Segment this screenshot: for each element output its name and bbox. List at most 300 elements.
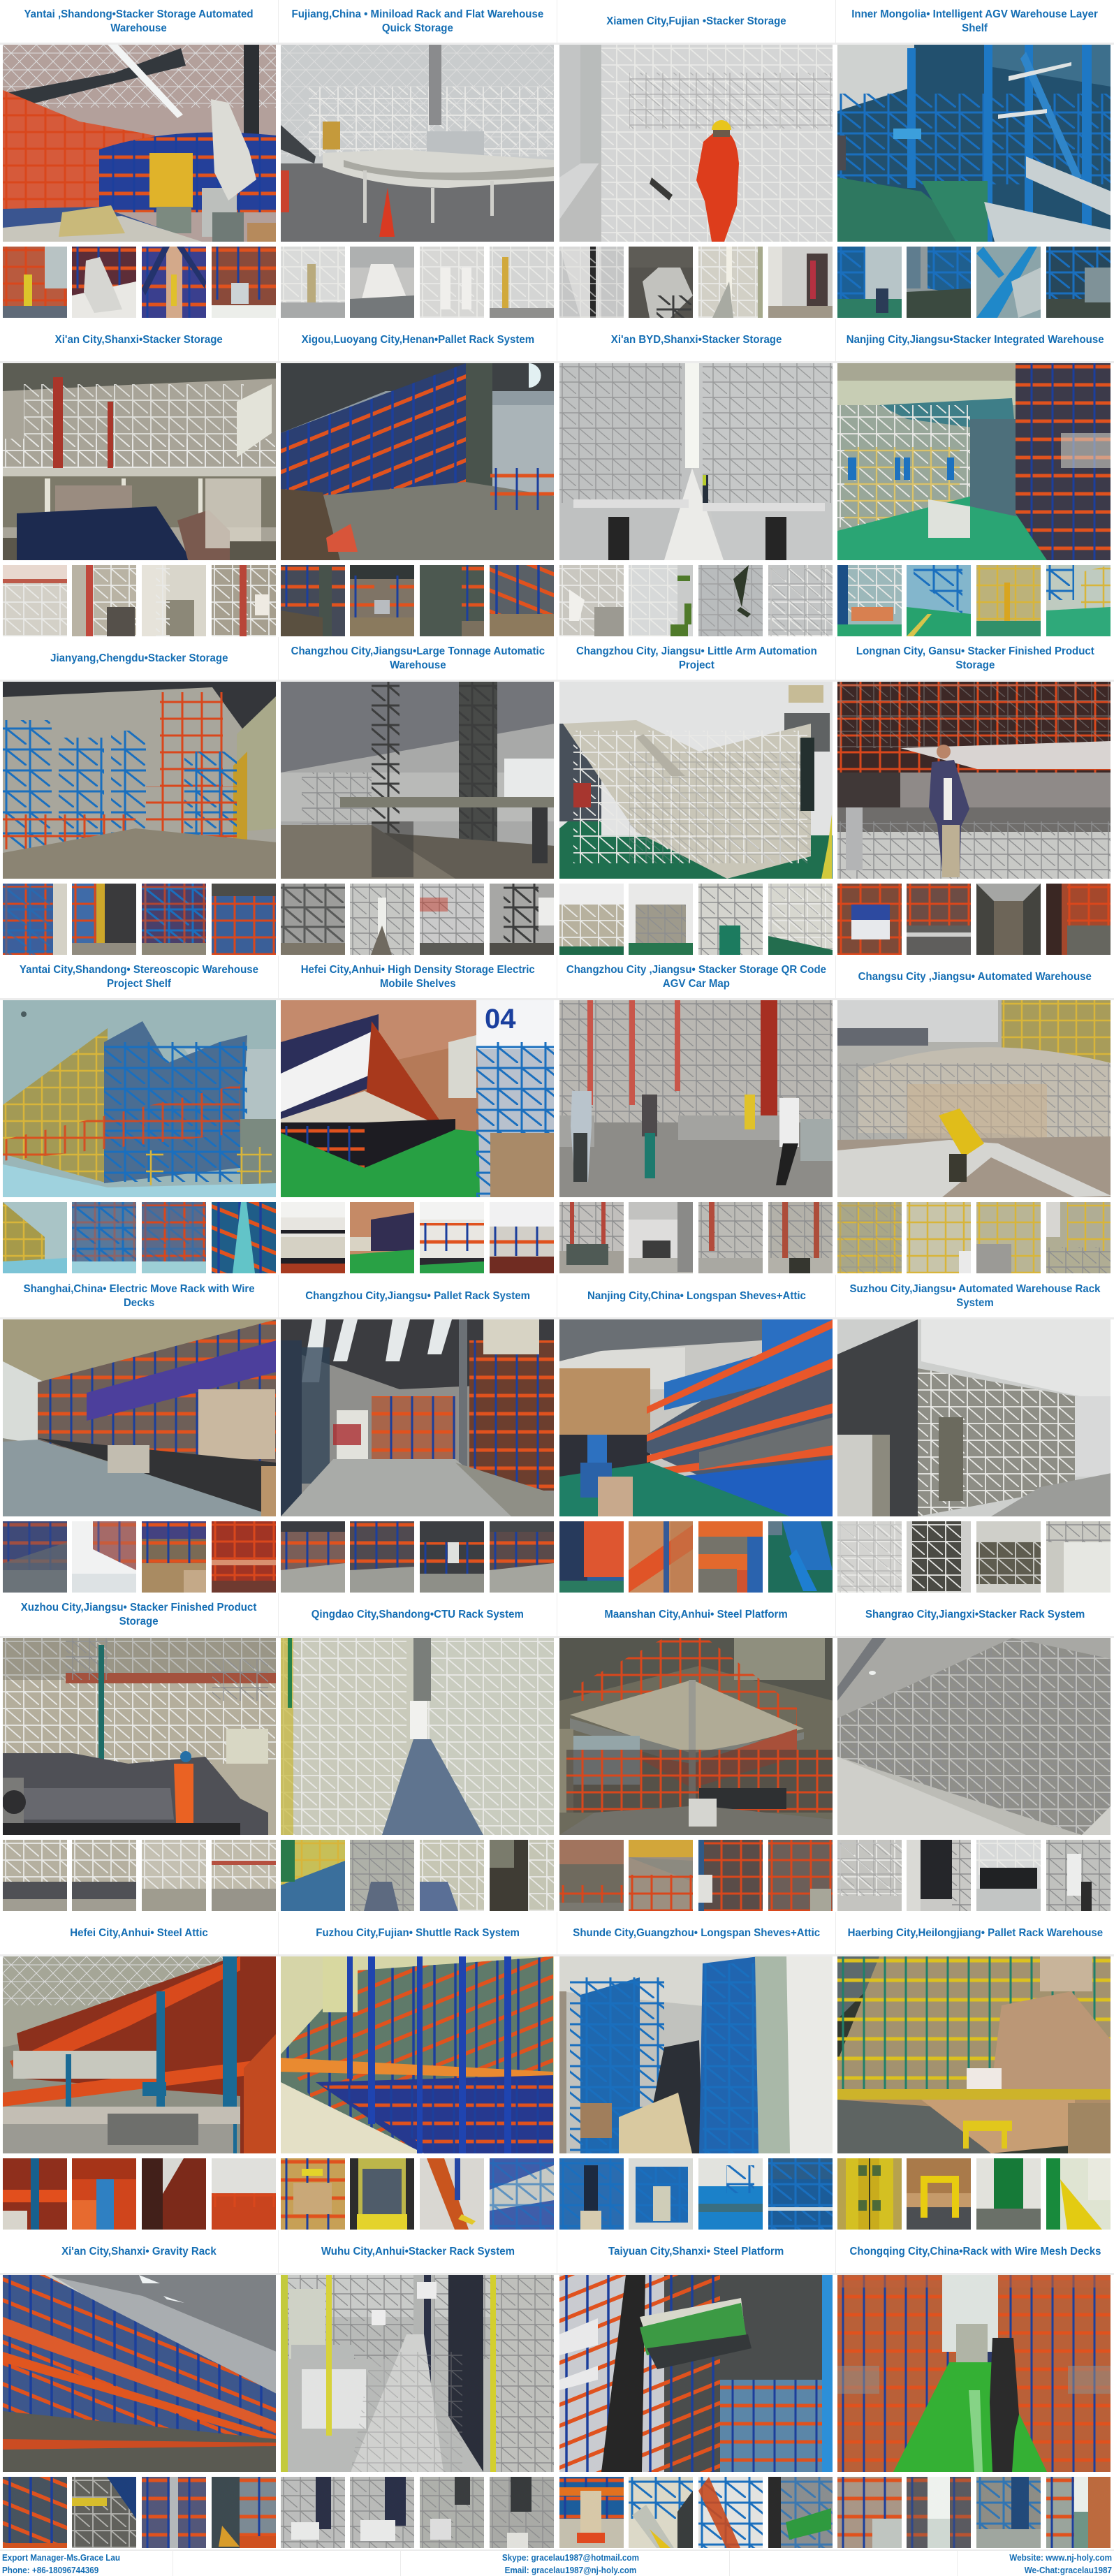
thumbnail 2 bbox=[907, 565, 971, 636]
thumbnail strip bbox=[281, 1202, 554, 1273]
thumbnail 3 bbox=[420, 247, 484, 318]
panel: Hefei steel attic bbox=[0, 1912, 279, 2230]
caption: Storage bbox=[119, 1615, 159, 1627]
caption: Changzhou City, Jiangsu• Little Arm Automation bbox=[576, 645, 816, 657]
main photo bbox=[837, 45, 1111, 242]
thumbnail 4 bbox=[490, 1840, 554, 1911]
caption: Qingdao City,Shandong•CTU Rack System bbox=[312, 1608, 524, 1620]
thumbnail strip bbox=[3, 884, 276, 955]
caption bbox=[279, 2230, 557, 2275]
thumbnail 2 bbox=[907, 247, 971, 318]
panel: Xuzhou stacker finished product bbox=[0, 1593, 279, 1912]
caption bbox=[279, 1275, 557, 1319]
main photo bbox=[559, 45, 833, 242]
thumbnail 1 bbox=[559, 2477, 624, 2548]
thumbnail 4 bbox=[212, 1840, 276, 1911]
thumbnail 2 bbox=[629, 2158, 693, 2230]
caption bbox=[836, 1593, 1114, 1638]
thumbnail 4 bbox=[490, 2477, 554, 2548]
main photo bbox=[281, 2275, 554, 2472]
caption: Xi'an City,Shanxi•Stacker Storage bbox=[55, 334, 223, 345]
panel: Shunde longspan attic bbox=[557, 1912, 836, 2230]
panel: Fuzhou shuttle rack bbox=[279, 1912, 557, 2230]
thumbnail 4 bbox=[1046, 565, 1111, 636]
thumbnail 4 bbox=[490, 1202, 554, 1273]
thumbnail 1 bbox=[559, 1521, 624, 1593]
main photo bbox=[559, 1319, 833, 1516]
caption bbox=[0, 1912, 279, 1956]
main photo bbox=[3, 682, 276, 879]
main photo bbox=[3, 1956, 276, 2153]
contact: skype and email: Email: gracelau1987@nj-holy.com bbox=[505, 2565, 636, 2575]
thumbnail strip bbox=[559, 1521, 833, 1593]
thumbnail 1 bbox=[281, 1202, 345, 1273]
caption bbox=[836, 1275, 1114, 1319]
thumbnail 4 bbox=[1046, 1840, 1111, 1911]
thumbnail 2 bbox=[72, 1202, 136, 1273]
caption: Shelf bbox=[962, 22, 988, 34]
thumbnail 2 bbox=[629, 1521, 693, 1593]
caption: Fujiang,China • Miniload Rack and Flat Warehouse bbox=[292, 8, 543, 20]
thumbnail 1 bbox=[281, 1521, 345, 1593]
thumbnail strip bbox=[559, 2158, 833, 2230]
main photo bbox=[3, 363, 276, 560]
thumbnail 3 bbox=[698, 565, 763, 636]
thumbnail strip bbox=[281, 2477, 554, 2548]
main photo bbox=[559, 363, 833, 560]
thumbnail 3 bbox=[142, 2477, 206, 2548]
contact: website and wechat: We-Chat:gracelau1987 bbox=[1025, 2565, 1112, 2575]
thumbnail 1 bbox=[3, 884, 67, 955]
thumbnail strip bbox=[3, 2158, 276, 2230]
thumbnail 2 bbox=[72, 884, 136, 955]
main photo bbox=[837, 363, 1111, 560]
thumbnail 2 bbox=[350, 884, 414, 955]
main photo bbox=[837, 682, 1111, 879]
caption bbox=[836, 2230, 1114, 2275]
contact: skype and email bbox=[494, 2552, 634, 2576]
thumbnail 3 bbox=[420, 565, 484, 636]
thumbnail strip bbox=[837, 1840, 1111, 1911]
panel: Jianyang Chengdu stacker storage bbox=[0, 637, 279, 955]
thumbnail strip bbox=[281, 1840, 554, 1911]
thumbnail 4 bbox=[1046, 884, 1111, 955]
caption: Changzhou City ,Jiangsu• Stacker Storage QR Code bbox=[566, 964, 826, 975]
main photo bbox=[281, 45, 554, 242]
caption: Yantai ,Shandong•Stacker Storage Automated bbox=[24, 8, 254, 20]
thumbnail 2 bbox=[629, 2477, 693, 2548]
caption: Hefei City,Anhui• High Density Storage Electric bbox=[300, 964, 535, 975]
thumbnail 2 bbox=[629, 1202, 693, 1273]
thumbnail 3 bbox=[420, 1840, 484, 1911]
caption: Xi'an City,Shanxi• Gravity Rack bbox=[61, 2245, 217, 2257]
thumbnail strip bbox=[3, 1840, 276, 1911]
thumbnail 4 bbox=[212, 1202, 276, 1273]
thumbnail 1 bbox=[559, 1202, 624, 1273]
main photo bbox=[3, 45, 276, 242]
caption: AGV Car Map bbox=[663, 978, 730, 989]
panel: Chongqing rack with wire mesh decks bbox=[836, 2230, 1114, 2549]
contact: website and wechat: Website: www.nj-holy.com bbox=[1009, 2552, 1112, 2563]
thumbnail 2 bbox=[350, 1840, 414, 1911]
thumbnail 1 bbox=[837, 1840, 902, 1911]
caption: Shunde City,Guangzhou• Longspan Sheves+Attic bbox=[573, 1926, 820, 1939]
thumbnail 3 bbox=[976, 2477, 1041, 2548]
contact: skype and email: Skype: gracelau1987@hotmail.com bbox=[502, 2552, 639, 2563]
thumbnail 3 bbox=[976, 1202, 1041, 1273]
caption bbox=[279, 956, 557, 1000]
thumbnail strip bbox=[559, 565, 833, 636]
thumbnail strip bbox=[559, 1840, 833, 1911]
thumbnail 3 bbox=[420, 1202, 484, 1273]
main photo bbox=[281, 1000, 554, 1197]
panel: Suzhou automated warehouse rack bbox=[836, 1282, 1114, 1593]
caption: Shanghai,China• Electric Move Rack with Wire bbox=[23, 1282, 255, 1295]
thumbnail 4 bbox=[768, 565, 833, 636]
main photo bbox=[281, 1956, 554, 2153]
caption: System bbox=[956, 1296, 994, 1309]
panel: Maanshan steel platform bbox=[557, 1593, 836, 1912]
panel: Haerbing pallet rack warehouse bbox=[836, 1912, 1114, 2230]
footer contact bar bbox=[0, 2549, 1114, 2576]
caption: Nanjing City,China• Longspan Sheves+Attic bbox=[587, 1289, 805, 1302]
panel: Fujiang China miniload rack bbox=[279, 0, 557, 318]
caption bbox=[557, 1593, 836, 1638]
caption: Haerbing City,Heilongjiang• Pallet Rack Warehouse bbox=[847, 1926, 1103, 1939]
panel: Wuhu stacker rack bbox=[279, 2230, 557, 2549]
thumbnail 2 bbox=[350, 2158, 414, 2230]
thumbnail 2 bbox=[350, 247, 414, 318]
caption: Yantai City,Shandong• Stereoscopic Warehouse bbox=[20, 964, 258, 975]
caption: Jianyang,Chengdu•Stacker Storage bbox=[50, 652, 228, 664]
thumbnail 3 bbox=[420, 2158, 484, 2230]
thumbnail 4 bbox=[768, 1840, 833, 1911]
panel: Taiyuan steel platform bbox=[557, 2230, 836, 2549]
caption: Xigou,Luoyang City,Henan•Pallet Rack System bbox=[301, 334, 534, 345]
main photo bbox=[559, 682, 833, 879]
caption bbox=[0, 956, 279, 1000]
thumbnail 1 bbox=[281, 565, 345, 636]
caption: Changzhou City,Jiangsu• Pallet Rack System bbox=[305, 1289, 530, 1302]
main photo bbox=[559, 1000, 833, 1197]
panel: Xi'an gravity rack bbox=[0, 2230, 279, 2549]
caption bbox=[557, 956, 836, 1000]
caption bbox=[0, 2230, 279, 2275]
thumbnail 3 bbox=[420, 884, 484, 955]
thumbnail 3 bbox=[976, 884, 1041, 955]
thumbnail 4 bbox=[212, 884, 276, 955]
thumbnail 1 bbox=[837, 884, 902, 955]
caption bbox=[557, 637, 836, 682]
thumbnail 1 bbox=[837, 2158, 902, 2230]
caption: Quick Storage bbox=[382, 22, 453, 34]
thumbnail 2 bbox=[72, 247, 136, 318]
caption bbox=[557, 0, 836, 45]
thumbnail 2 bbox=[72, 2158, 136, 2230]
thumbnail 1 bbox=[559, 884, 624, 955]
thumbnail 2 bbox=[907, 884, 971, 955]
main photo bbox=[3, 1319, 276, 1516]
thumbnail 1 bbox=[559, 2158, 624, 2230]
caption bbox=[279, 637, 557, 682]
contact: export manager: Export Manager-Ms.Grace Lau bbox=[2, 2552, 120, 2563]
main photo bbox=[3, 1638, 276, 1835]
panel: Inner Mongolia AGV warehouse bbox=[836, 8, 1114, 318]
thumbnail strip bbox=[3, 2477, 276, 2548]
thumbnail 3 bbox=[698, 2158, 763, 2230]
caption: Suzhou City,Jiangsu• Automated Warehouse Rack bbox=[849, 1282, 1101, 1295]
thumbnail strip bbox=[837, 2477, 1111, 2548]
thumbnail 4 bbox=[212, 2158, 276, 2230]
caption: Xi'an BYD,Shanxi•Stacker Storage bbox=[611, 334, 782, 345]
thumbnail 2 bbox=[350, 2477, 414, 2548]
caption bbox=[836, 319, 1114, 363]
main photo bbox=[559, 1956, 833, 2153]
thumbnail strip bbox=[559, 1202, 833, 1273]
thumbnail 1 bbox=[3, 2158, 67, 2230]
main photo bbox=[281, 1638, 554, 1835]
caption: Inner Mongolia• Intelligent AGV Warehouse Layer bbox=[852, 8, 1098, 20]
caption bbox=[557, 1912, 836, 1956]
thumbnail 1 bbox=[837, 247, 902, 318]
thumbnail 2 bbox=[907, 1202, 971, 1273]
thumbnail 2 bbox=[72, 2477, 136, 2548]
thumbnail 1 bbox=[837, 565, 902, 636]
thumbnail 4 bbox=[768, 247, 833, 318]
thumbnail 4 bbox=[1046, 1202, 1111, 1273]
panel: Xi'an BYD stacker storage bbox=[557, 319, 836, 636]
panel: Xi'an Shanxi stacker storage bbox=[0, 319, 279, 636]
main photo bbox=[281, 1319, 554, 1516]
thumbnail 4 bbox=[768, 1202, 833, 1273]
caption: Hefei City,Anhui• Steel Attic bbox=[70, 1926, 208, 1939]
caption: Changzhou City,Jiangsu•Large Tonnage Automatic bbox=[291, 645, 545, 657]
thumbnail 4 bbox=[490, 1521, 554, 1593]
caption: Fuzhou City,Fujian• Shuttle Rack System bbox=[316, 1926, 520, 1939]
thumbnail 3 bbox=[976, 247, 1041, 318]
caption: Shangrao City,Jiangxi•Stacker Rack System bbox=[865, 1608, 1085, 1620]
thumbnail strip bbox=[837, 2158, 1111, 2230]
thumbnail 4 bbox=[768, 2158, 833, 2230]
thumbnail 1 bbox=[281, 2477, 345, 2548]
thumbnail 4 bbox=[212, 2477, 276, 2548]
caption: Changsu City ,Jiangsu• Automated Warehouse bbox=[858, 971, 1092, 982]
main photo bbox=[837, 1319, 1111, 1516]
thumbnail 1 bbox=[281, 884, 345, 955]
thumbnail strip bbox=[837, 1521, 1111, 1593]
thumbnail 1 bbox=[837, 1202, 902, 1273]
caption: Taiyuan City,Shanxi• Steel Platform bbox=[608, 2245, 784, 2257]
thumbnail 2 bbox=[629, 247, 693, 318]
thumbnail strip bbox=[281, 2158, 554, 2230]
panel: Nanjing Jiangsu stacker integrated warehouse bbox=[836, 334, 1114, 636]
main photo bbox=[837, 2275, 1111, 2472]
thumbnail 1 bbox=[281, 247, 345, 318]
thumbnail 2 bbox=[907, 1840, 971, 1911]
caption bbox=[557, 319, 836, 363]
thumbnail 2 bbox=[907, 2158, 971, 2230]
panel: Qingdao CTU rack bbox=[279, 1593, 557, 1912]
panel: Nanjing longspan shelves attic bbox=[557, 1275, 836, 1593]
caption: Nanjing City,Jiangsu•Stacker Integrated Warehouse bbox=[847, 334, 1104, 345]
thumbnail 1 bbox=[3, 247, 67, 318]
thumbnail 4 bbox=[1046, 2477, 1111, 2548]
thumbnail 3 bbox=[142, 247, 206, 318]
thumbnail 3 bbox=[142, 1202, 206, 1273]
thumbnail 1 bbox=[837, 2477, 902, 2548]
thumbnail 3 bbox=[420, 2477, 484, 2548]
thumbnail 1 bbox=[837, 1521, 902, 1593]
thumbnail 4 bbox=[212, 1521, 276, 1593]
thumbnail strip bbox=[3, 565, 276, 636]
caption: Maanshan City,Anhui• Steel Platform bbox=[605, 1608, 788, 1620]
main photo bbox=[281, 363, 554, 560]
contact: export manager bbox=[2, 2552, 133, 2576]
caption: Mobile Shelves bbox=[380, 978, 455, 989]
thumbnail strip bbox=[281, 565, 554, 636]
caption bbox=[836, 956, 1114, 1000]
main photo bbox=[559, 2275, 833, 2472]
thumbnail 3 bbox=[142, 1521, 206, 1593]
panel: Longnan Gansu stacker bbox=[836, 645, 1114, 955]
thumbnail 4 bbox=[1046, 1521, 1111, 1593]
thumbnail 4 bbox=[768, 1521, 833, 1593]
thumbnail 4 bbox=[490, 884, 554, 955]
thumbnail 1 bbox=[559, 1840, 624, 1911]
thumbnail 2 bbox=[72, 565, 136, 636]
thumbnail 1 bbox=[3, 2477, 67, 2548]
thumbnail 2 bbox=[350, 565, 414, 636]
thumbnail 1 bbox=[3, 1521, 67, 1593]
caption: Project Shelf bbox=[107, 978, 171, 989]
thumbnail strip bbox=[281, 1521, 554, 1593]
thumbnail 3 bbox=[698, 884, 763, 955]
thumbnail 2 bbox=[72, 1840, 136, 1911]
caption bbox=[836, 1912, 1114, 1956]
caption bbox=[836, 0, 1114, 45]
thumbnail 4 bbox=[212, 565, 276, 636]
thumbnail 4 bbox=[768, 884, 833, 955]
caption bbox=[279, 319, 557, 363]
panel: Changzhou large tonnage automatic warehouse bbox=[279, 637, 557, 955]
caption bbox=[279, 1912, 557, 1956]
caption: Storage bbox=[955, 659, 995, 671]
panel: Shangrao stacker rack bbox=[836, 1593, 1114, 1912]
caption bbox=[0, 1593, 279, 1638]
panel: Changzhou pallet rack system bbox=[279, 1275, 557, 1593]
thumbnail 3 bbox=[698, 1521, 763, 1593]
main photo: 04 bbox=[485, 1004, 516, 1034]
thumbnail 2 bbox=[629, 884, 693, 955]
main photo bbox=[3, 1000, 276, 1197]
main photo bbox=[559, 1638, 833, 1835]
caption: Warehouse bbox=[111, 22, 167, 34]
caption bbox=[279, 1593, 557, 1638]
thumbnail strip bbox=[3, 1202, 276, 1273]
thumbnail 3 bbox=[142, 884, 206, 955]
thumbnail strip bbox=[837, 247, 1111, 318]
thumbnail strip bbox=[837, 1202, 1111, 1273]
caption: Xiamen City,Fujian •Stacker Storage bbox=[606, 15, 786, 27]
panel: Changzhou QR code AGV bbox=[557, 956, 836, 1273]
caption: Wuhu City,Anhui•Stacker Rack System bbox=[321, 2245, 515, 2257]
panel: Changsu automated warehouse bbox=[836, 971, 1114, 1273]
contact: export manager: Phone: +86-18096744369 bbox=[2, 2565, 98, 2575]
caption bbox=[0, 0, 279, 45]
thumbnail 4 bbox=[212, 247, 276, 318]
thumbnail 2 bbox=[350, 1521, 414, 1593]
caption bbox=[0, 1275, 279, 1319]
caption: Warehouse bbox=[390, 659, 446, 671]
thumbnail 4 bbox=[490, 565, 554, 636]
thumbnail 1 bbox=[3, 565, 67, 636]
panel: Shanghai electric move rack bbox=[0, 1275, 279, 1593]
thumbnail strip bbox=[3, 1521, 276, 1593]
panel: Yantai stereoscopic warehouse bbox=[0, 956, 279, 1273]
thumbnail strip bbox=[559, 884, 833, 955]
thumbnail strip bbox=[559, 247, 833, 318]
caption: Decks bbox=[124, 1296, 154, 1309]
panel: Xiamen Fujian stacker storage bbox=[557, 0, 836, 318]
thumbnail strip bbox=[281, 884, 554, 955]
thumbnail 2 bbox=[907, 1521, 971, 1593]
main photo bbox=[837, 1956, 1111, 2153]
thumbnail 3 bbox=[976, 1521, 1041, 1593]
thumbnail 1 bbox=[281, 1840, 345, 1911]
thumbnail 3 bbox=[698, 1202, 763, 1273]
thumbnail 2 bbox=[350, 1202, 414, 1273]
thumbnail 1 bbox=[559, 247, 624, 318]
thumbnail 3 bbox=[976, 565, 1041, 636]
thumbnail 3 bbox=[698, 2477, 763, 2548]
panel: Yantai Shandong stacker storage bbox=[0, 0, 279, 318]
thumbnail 4 bbox=[768, 2477, 833, 2548]
thumbnail 2 bbox=[907, 2477, 971, 2548]
thumbnail 1 bbox=[281, 2158, 345, 2230]
thumbnail 2 bbox=[72, 1521, 136, 1593]
main photo bbox=[3, 2275, 276, 2472]
main photo bbox=[837, 1638, 1111, 1835]
thumbnail 4 bbox=[1046, 2158, 1111, 2230]
thumbnail strip bbox=[837, 565, 1111, 636]
thumbnail 3 bbox=[142, 565, 206, 636]
caption: Xuzhou City,Jiangsu• Stacker Finished Product bbox=[21, 1601, 257, 1613]
thumbnail strip bbox=[3, 247, 276, 318]
thumbnail 2 bbox=[629, 1840, 693, 1911]
thumbnail 3 bbox=[976, 1840, 1041, 1911]
thumbnail strip bbox=[559, 2477, 833, 2548]
caption: Project bbox=[679, 659, 714, 671]
thumbnail 3 bbox=[420, 1521, 484, 1593]
caption bbox=[279, 0, 557, 45]
main photo bbox=[837, 1000, 1111, 1197]
caption: Chongqing City,China•Rack with Wire Mesh Decks bbox=[849, 2245, 1101, 2257]
thumbnail 3 bbox=[976, 2158, 1041, 2230]
thumbnail 3 bbox=[142, 2158, 206, 2230]
thumbnail strip bbox=[837, 884, 1111, 955]
thumbnail 2 bbox=[629, 565, 693, 636]
caption bbox=[836, 637, 1114, 682]
thumbnail strip bbox=[281, 247, 554, 318]
caption: Longnan City, Gansu• Stacker Finished Product bbox=[856, 645, 1094, 657]
thumbnail 3 bbox=[698, 1840, 763, 1911]
caption bbox=[0, 319, 279, 363]
panel: Changzhou little arm automation bbox=[557, 637, 836, 955]
main photo bbox=[281, 682, 554, 879]
caption bbox=[0, 637, 279, 682]
thumbnail 4 bbox=[1046, 247, 1111, 318]
thumbnail 1 bbox=[559, 565, 624, 636]
